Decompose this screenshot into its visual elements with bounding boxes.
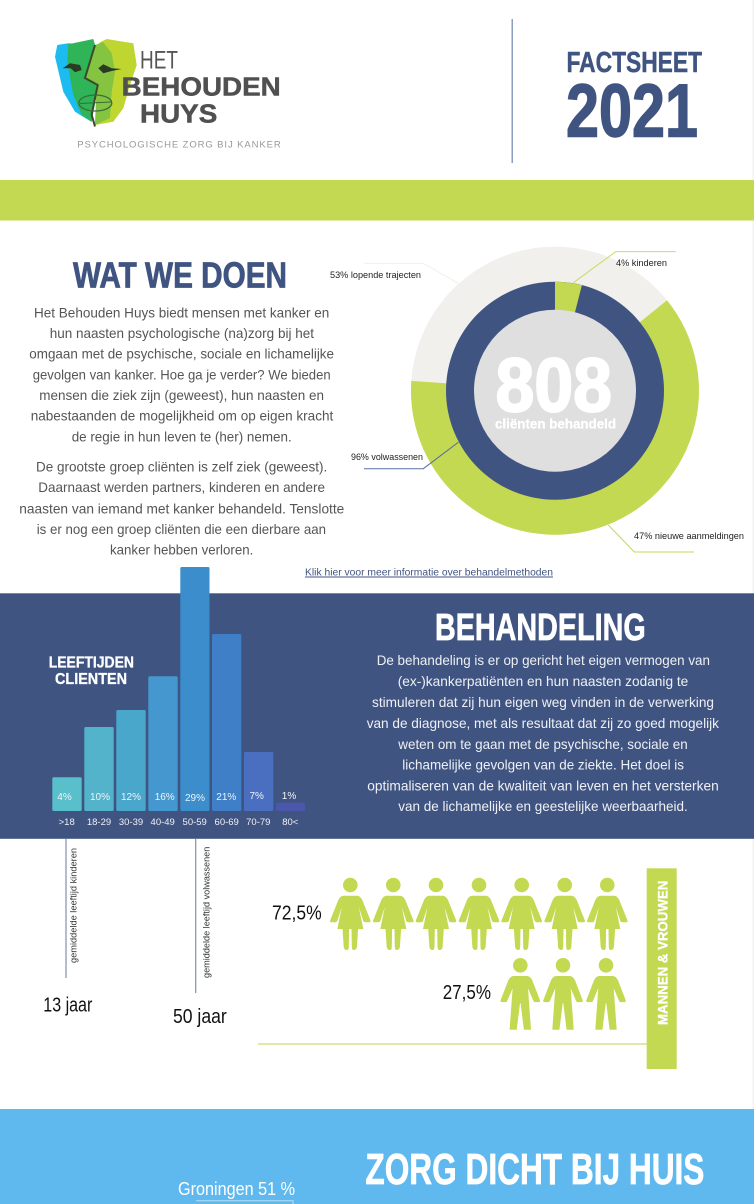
panel: zorg dicht bij huis <box>0 1109 754 1204</box>
chart title: CLIENTEN <box>55 671 127 688</box>
link: meer informatie: Klik hier voor meer informatie over behandelmethoden <box>305 568 553 578</box>
stat: gemiddelde leeftijd volwassenen: gemiddelde leeftijd volwassenen <box>201 847 212 978</box>
text block: behandeling: weten om te gaan met de psychische, sociale en <box>397 736 688 752</box>
callout: 4% kinderen: 4% kinderen <box>616 258 667 269</box>
age axis labels: 18-29 <box>87 817 111 828</box>
text block: intro: nabestaanden de mogelijkheid om op eigen kracht <box>31 408 333 424</box>
percentage labels: 29% <box>185 793 205 804</box>
heading: behandeling: BEHANDELING <box>435 607 646 649</box>
caption: clienten behandeld: cliënten behandeld <box>495 417 616 432</box>
text block: intro: de regie in hun leven te (her) nemen. <box>72 428 292 444</box>
text block: intro: omgaan met de psychische, sociale en lichamelijke <box>29 346 334 362</box>
stat: gemiddelde leeftijd volwassenen: 50 jaar <box>173 1006 227 1028</box>
stat: 72,5% vrouwen: 72,5% <box>272 902 322 924</box>
text block: client groups: is er nog een groep cliënten die een dierbare aan <box>37 521 326 537</box>
age axis labels <box>59 817 299 828</box>
age axis labels: 70-79 <box>246 817 270 828</box>
text block: behandeling: De behandeling is er op gericht het eigen vermogen van <box>377 652 710 668</box>
text block: behandeling: optimaliseren van de kwaliteit van leven en het versterken <box>367 777 719 793</box>
logo wordmark: behouden: BEHOUDEN <box>122 71 281 101</box>
text block: intro: gevolgen van kanker. Hoe ga je verder? We bieden <box>33 366 331 382</box>
percentage labels: 16% <box>155 792 175 803</box>
text block: intro: mensen die ziek zijn (geweest), hun naasten en <box>39 387 324 403</box>
outer ring: nieuwe aanmeldingen <box>411 300 699 535</box>
green banner <box>0 180 754 220</box>
text block: behandeling: (ex-)kankerpatiënten en hun naasten zodanig te <box>398 673 688 689</box>
percentage labels <box>57 791 296 804</box>
age axis labels: 50-59 <box>183 817 207 828</box>
bar chart: leeftijden <box>49 567 305 828</box>
region label: groningen: Groningen 51 % <box>178 1179 295 1199</box>
percentage labels: 1% <box>282 791 296 802</box>
title: 2021: 2021 <box>566 68 698 152</box>
title: factsheet: FACTSHEET <box>566 47 702 79</box>
chart title <box>49 654 134 688</box>
text block: behandeling: van de diagnose, met als resultaat dat zij zo goed mogelijk <box>367 715 720 731</box>
icon row: mannen <box>501 958 626 1030</box>
baseline rule <box>258 1043 647 1045</box>
age axis labels: 60-69 <box>215 817 239 828</box>
icon: face mask <box>55 39 137 126</box>
text block: intro <box>29 304 334 444</box>
percentage labels: 10% <box>90 792 110 803</box>
age axis labels: 30-39 <box>119 817 143 828</box>
text block: behandeling: van de lichamelijke en geestelijke weerbaarheid. <box>398 798 688 814</box>
callout: 53% lopende trajecten <box>330 263 458 283</box>
callout: 96% volwassenen: 96% volwassenen <box>351 452 423 463</box>
text block: client groups: kanker hebben verloren. <box>110 542 253 558</box>
logo wordmark: het: HET <box>140 46 178 74</box>
text block: behandeling <box>367 652 720 814</box>
stat: gemiddelde leeftijd kinderen <box>43 839 93 1017</box>
percentage labels: 12% <box>121 792 141 803</box>
age axis labels: 40-49 <box>151 817 175 828</box>
stat: gemiddelde leeftijd kinderen: gemiddelde leeftijd kinderen <box>69 848 80 963</box>
text block: intro: hun naasten psychologische (na)zorg bij het <box>50 325 314 341</box>
callout: 96% volwassenen <box>351 442 458 469</box>
centre disc <box>474 310 636 472</box>
callout: 53% lopende trajecten: 53% lopende trajecten <box>330 270 421 281</box>
text block: behandeling: stimuleren dat zij hun eigen weg vinden in de verwerking <box>372 694 714 710</box>
text block: client groups <box>19 458 345 558</box>
inner ring: kinderen <box>555 282 582 391</box>
outer ring: lopende trajecten <box>411 247 699 535</box>
icon row: vrouwen <box>330 878 628 950</box>
logo wordmark: huys: HUYS <box>140 99 217 129</box>
side label: mannen en vrouwen: MANNEN & VROUWEN <box>655 881 670 1025</box>
side label: mannen en vrouwen <box>647 868 677 1069</box>
stat: gemiddelde leeftijd volwassenen <box>173 839 227 1028</box>
bars <box>52 567 305 811</box>
percentage labels: 7% <box>249 791 264 802</box>
callout: 47% nieuwe aanmeldingen: 47% nieuwe aanmeldingen <box>634 531 744 542</box>
region leader line <box>196 1201 293 1204</box>
panel: behandeling background <box>0 593 754 839</box>
percentage labels: 4% <box>57 792 72 803</box>
inner ring: volwassenen <box>446 282 664 500</box>
text block: client groups: naasten van iemand met kanker behandeld. Tenslotte <box>19 500 345 516</box>
chart title: LEEFTIJDEN <box>49 654 134 671</box>
logo tagline: PSYCHOLOGISCHE ZORG BIJ KANKER <box>77 139 281 150</box>
text block: client groups: Daarnaast werden partners, kinderen en andere <box>38 479 325 495</box>
percentage labels: 21% <box>216 792 236 803</box>
text block: client groups: De grootste groep cliënten is zelf ziek (geweest). <box>36 458 327 474</box>
logo <box>55 39 281 150</box>
heading: wat we doen: WAT WE DOEN <box>73 254 287 296</box>
header divider <box>512 19 513 163</box>
total: 808: 808 <box>496 344 612 429</box>
text block: behandeling: lichamelijke gevolgen van de ziekte. Het doel is <box>402 756 684 772</box>
age axis labels: >18 <box>59 817 75 828</box>
text block: intro: Het Behouden Huys biedt mensen met kanker en <box>34 304 329 320</box>
donut chart <box>411 247 699 535</box>
stat: gemiddelde leeftijd kinderen: 13 jaar <box>43 995 93 1017</box>
callout: 4% kinderen <box>573 252 676 283</box>
age axis labels: 80< <box>282 817 299 828</box>
callout: 47% nieuwe aanmeldingen <box>608 525 744 552</box>
stat: 27,5% mannen: 27,5% <box>443 982 491 1004</box>
